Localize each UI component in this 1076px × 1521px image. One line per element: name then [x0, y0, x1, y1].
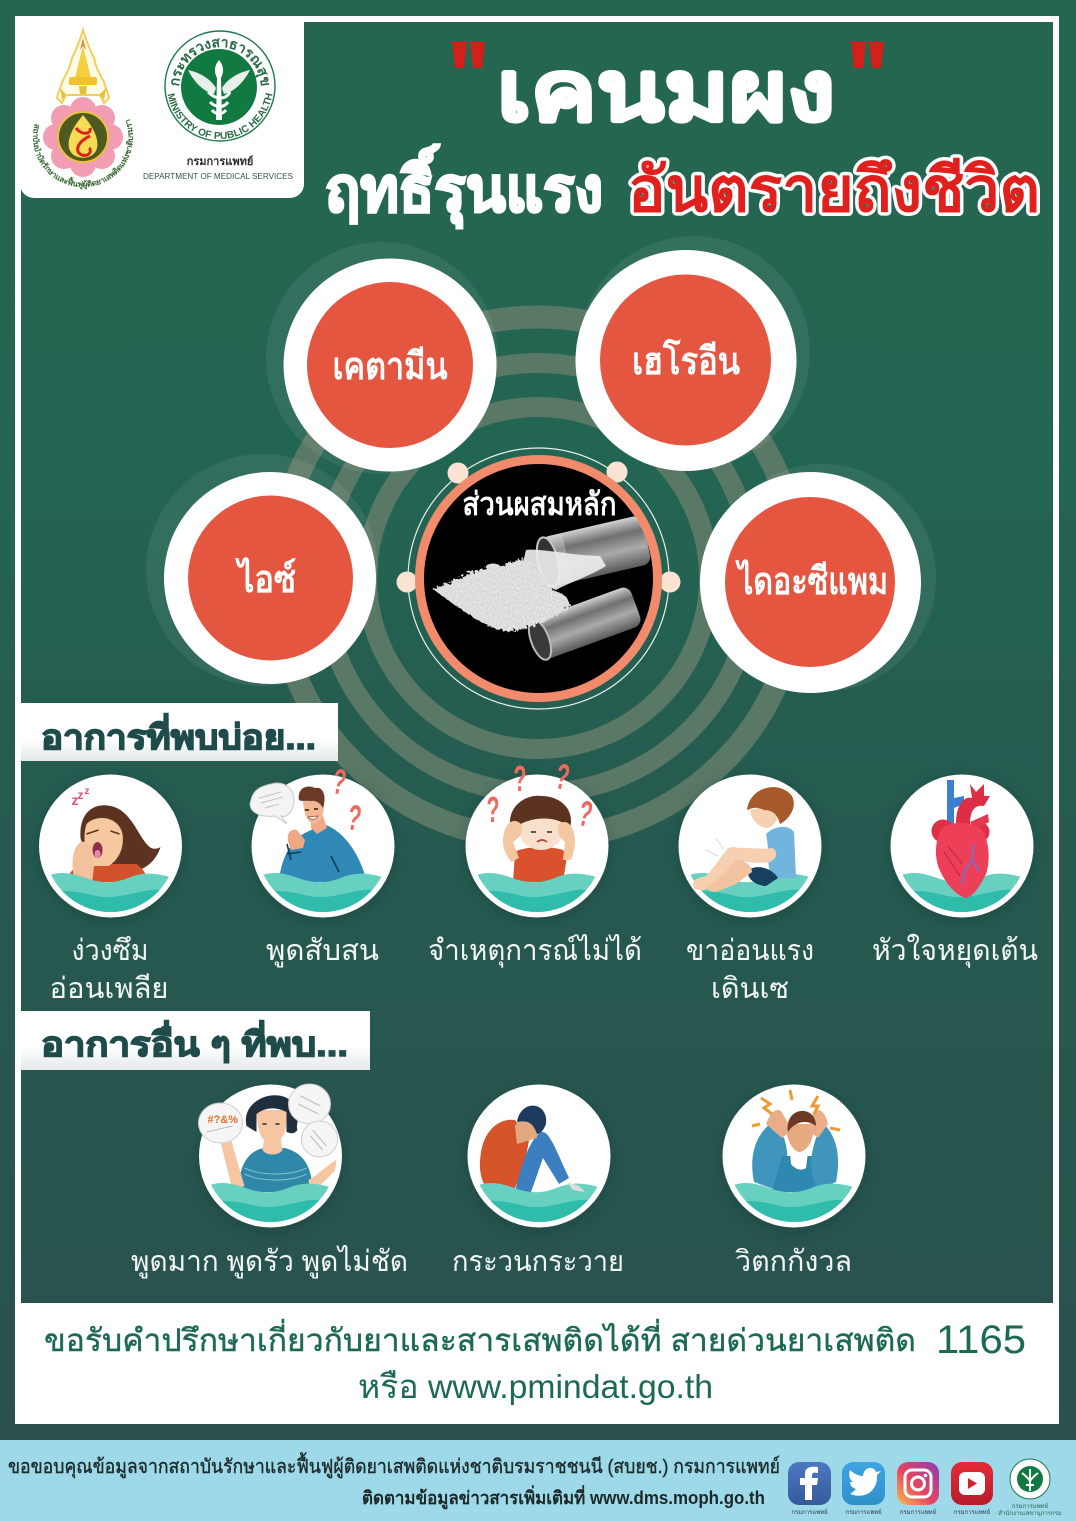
icon: restless hunched man — [467, 1084, 611, 1231]
icon: instagram — [897, 1462, 939, 1516]
circle: heroin — [576, 236, 810, 471]
symptom labels row 2: พูดมาก พูดรัว พูดไม่ชัด — [131, 1244, 408, 1279]
icon: twitter: กรมการแพทย์ — [845, 1508, 882, 1516]
icon: boy who cannot remember: ? — [575, 792, 596, 835]
symptom labels row 1: ขาอ่อนแรง — [686, 935, 814, 967]
logo: ministry of public health: กรมการแพทย์ — [187, 155, 253, 168]
website: หรือ www.pmindat.go.th — [358, 1368, 713, 1405]
heading tab: common symptoms — [21, 703, 338, 761]
symptom labels row 1: เดินเซ — [711, 973, 789, 1005]
follow text: ติดตามข้อมูลข่าวสารเพิ่มเติมที่ www.dms.moph.go.th — [362, 1485, 765, 1510]
centre circle: main ingredient — [396, 448, 680, 709]
circle: diazepam: ไดอะซีแพม — [735, 559, 888, 603]
icon: confused man: ? — [344, 796, 364, 839]
logo: ministry of public health: กระทรวงสาธารณสุข — [171, 38, 270, 86]
hotline panel — [15, 1303, 1059, 1424]
icon: youtube: กรมการแพทย์ — [954, 1508, 990, 1516]
title quote marks — [452, 42, 884, 68]
symptom labels row 2 — [131, 1244, 852, 1279]
icon: anxious man — [722, 1084, 866, 1231]
logo: ministry of public health — [143, 30, 293, 181]
subtitle white: ฤทธิ์รุนแรง — [325, 144, 603, 228]
icon: department seal: กรมการแพทย์ — [1012, 1502, 1048, 1510]
icon: facebook — [788, 1462, 831, 1516]
icon: boy who cannot remember: ? — [514, 758, 526, 799]
circle: ketamine: เคตามีน — [332, 346, 448, 388]
heading tab: common symptoms: อาการที่พบบ่อย... — [41, 713, 316, 757]
icon: confused man — [250, 760, 395, 921]
icon: instagram: กรมการแพทย์ — [900, 1508, 936, 1516]
title main word: เคนมผง — [497, 44, 835, 138]
icon: boy with weak legs — [678, 774, 822, 921]
credit text: ขอขอบคุณข้อมูลจากสถาบันรักษาและฟื้นฟูผู้ติดยาเสพติดแห่งชาติบรมราชชนนี (สบยช.) กรมการแพทย์ — [8, 1452, 780, 1479]
speech bubbles — [198, 1084, 338, 1157]
symptom labels row 1: อ่อนเพลีย — [50, 973, 168, 1005]
circle: ice: ไอซ์ — [235, 557, 296, 601]
circle: ice — [146, 454, 378, 686]
heading tab: other symptoms: อาการอื่น ๆ ที่พบ... — [41, 1020, 348, 1064]
icon: confused man: ? — [329, 760, 349, 803]
speech bubble — [250, 783, 294, 824]
heading tab: other symptoms — [21, 1011, 370, 1070]
logo panel — [21, 22, 304, 198]
icon: over-talking man: #?&% — [208, 1114, 238, 1126]
hotline number: 1165 — [936, 1318, 1026, 1362]
footer — [0, 1440, 1076, 1521]
icon: over-talking man — [198, 1084, 342, 1231]
symptom labels row 1: หัวใจหยุดเต้น — [872, 933, 1038, 968]
hotline text: ขอรับคำปรึกษาเกี่ยวกับยาและสารเสพติดได้ที่ สายด่วนยาเสพติด — [44, 1319, 916, 1358]
icon: drowsy woman yawning — [38, 774, 182, 921]
symptom labels row 2: กระวนกระวาย — [452, 1246, 624, 1278]
circle: heroin: เฮโรอีน — [632, 338, 740, 383]
circle: ketamine — [266, 242, 498, 474]
circle: diazepam — [700, 464, 936, 693]
icon: boy who cannot remember: ? — [486, 789, 500, 830]
icon: boy who cannot remember — [465, 755, 609, 921]
icon: boy who cannot remember: ? — [552, 755, 573, 798]
powder and vials photo — [432, 515, 652, 663]
icon: department seal — [998, 1459, 1062, 1517]
logo: ministry of public health: MINISTRY OF PUBLIC HEALTH — [168, 93, 272, 139]
icon: drowsy woman yawning: z — [78, 788, 84, 802]
symptom labels row 2: วิตกกังวล — [735, 1246, 852, 1278]
title — [325, 42, 1040, 228]
icon: drowsy woman yawning: z — [72, 792, 78, 808]
symptom labels row 1: พูดสับสน — [266, 935, 379, 968]
symptom labels row 1: ง่วงซึม — [72, 935, 148, 967]
icon: facebook: กรมการแพทย์ — [791, 1508, 828, 1516]
symptom labels row 1 — [50, 933, 1038, 1005]
symptom labels row 1: จำเหตุการณ์ไม่ได้ — [428, 933, 642, 968]
logo: ministry of public health: DEPARTMENT OF MEDICAL SERVICES — [143, 171, 293, 181]
icon: drowsy woman yawning: z — [84, 786, 90, 797]
background concentric rings — [277, 317, 799, 839]
icon: heart — [890, 774, 1034, 921]
subtitle red: อันตรายถึงชีวิต — [628, 156, 1040, 225]
icon: youtube — [951, 1462, 993, 1516]
centre circle: main ingredient: ส่วนผสมหลัก — [462, 486, 616, 522]
icon: department seal: สำนักงานเลขานุการกรม — [998, 1510, 1062, 1517]
icon: twitter — [842, 1462, 885, 1516]
logo: institute emblem — [32, 26, 134, 190]
